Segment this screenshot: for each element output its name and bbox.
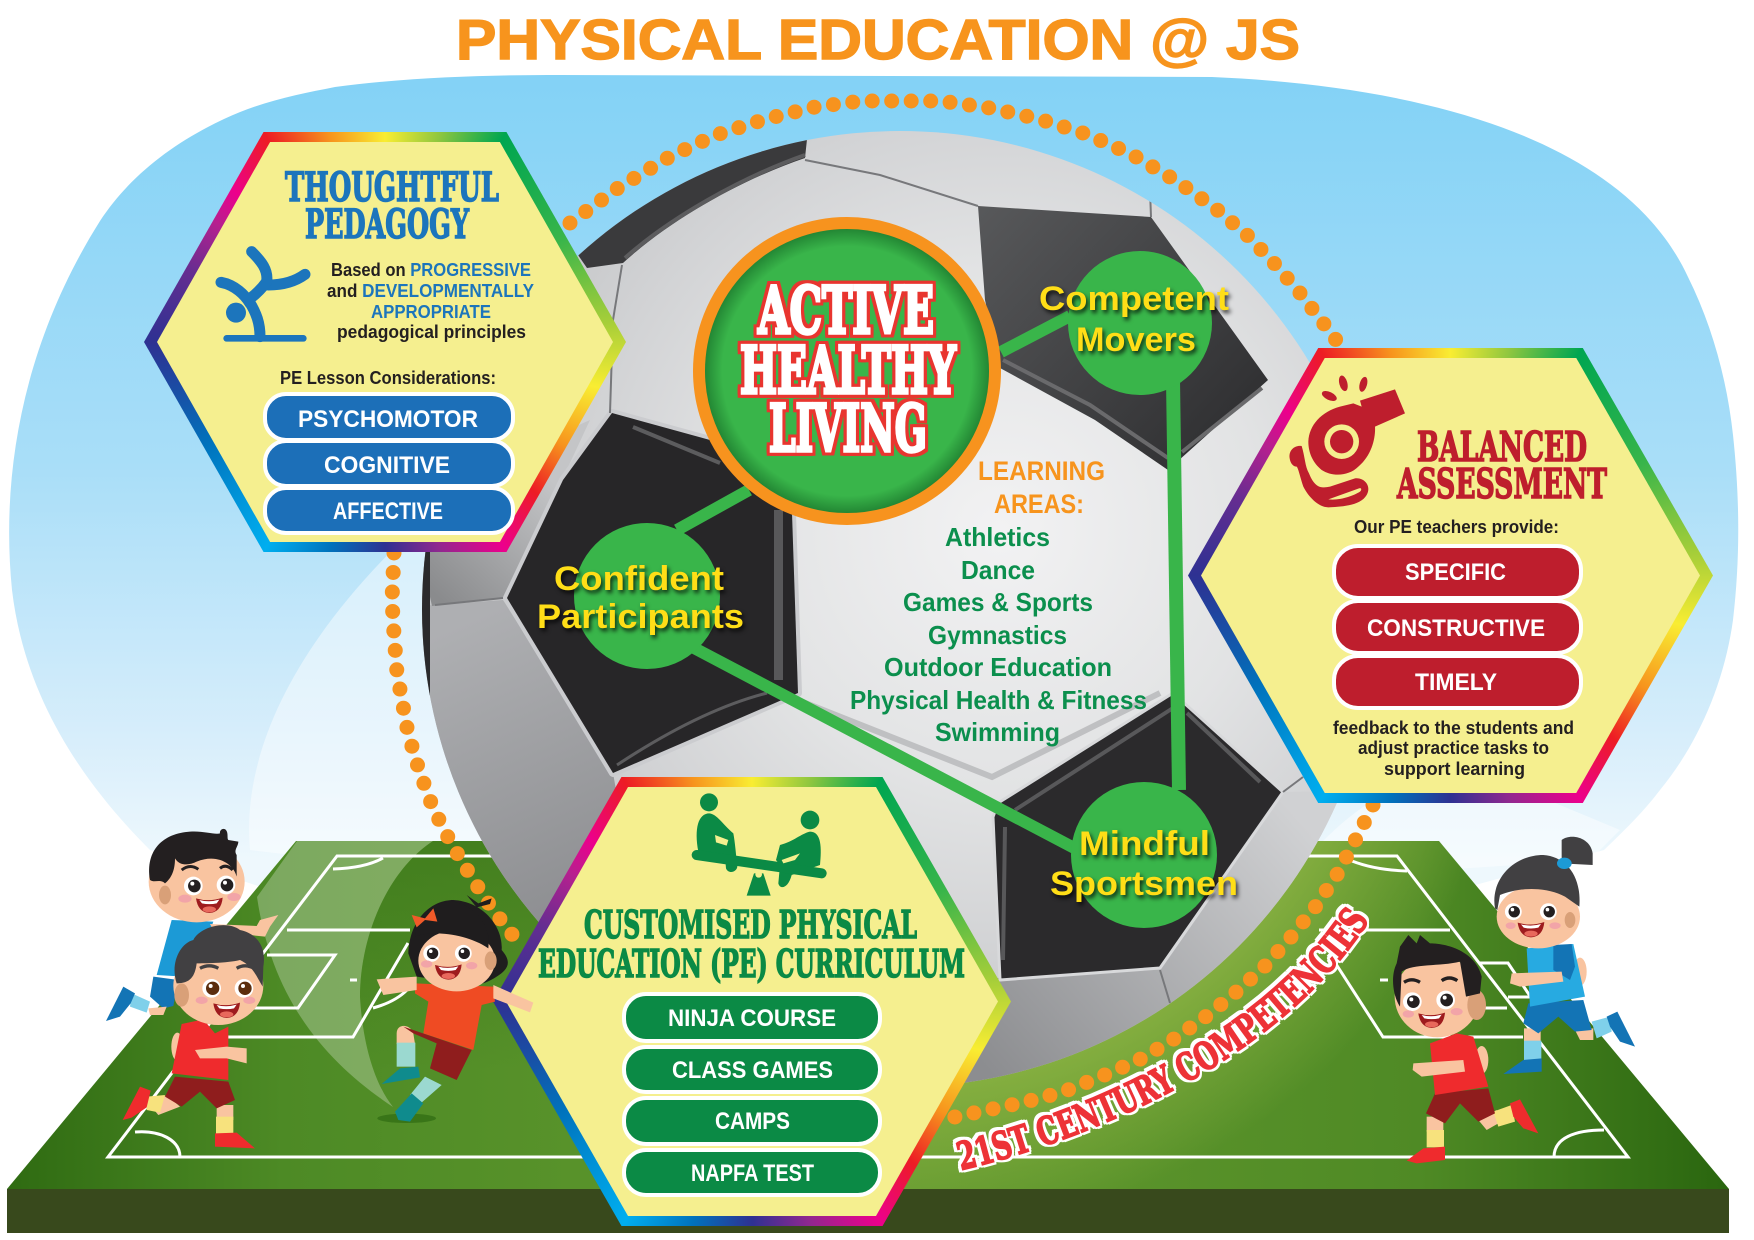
pill: psychomotor: PSYCHOMOTOR <box>298 406 478 433</box>
panel: thoughtful pedagogy <box>144 132 626 552</box>
center circle: active healthy living: HEALTHY <box>740 333 956 409</box>
text: pedagogical principles: Based on PROGRESSIVE <box>331 260 531 280</box>
heading: thoughtful pedagogy <box>284 170 499 240</box>
football <box>418 130 1400 1100</box>
field markings <box>108 856 1628 1157</box>
pill: constructive: CONSTRUCTIVE <box>1367 615 1545 642</box>
pill: napfa test <box>624 1150 880 1195</box>
text: lesson considerations: PE Lesson Considerations: <box>280 368 496 388</box>
text: feedback <box>1333 718 1574 779</box>
pill: specific <box>1334 546 1581 598</box>
ball patch: top right <box>978 206 1268 470</box>
text: pedagogical principles: and DEVELOPMENTALLY <box>327 281 534 301</box>
pill: cognitive: COGNITIVE <box>324 452 450 479</box>
field side face <box>7 1189 1729 1233</box>
node: confident participants: Confident <box>554 560 724 598</box>
heading: customised curriculum <box>538 902 965 986</box>
curved label: 21st century competencies: 21ST CENTURY COMPETENCIES <box>952 904 1370 1173</box>
node: mindful sportsmen <box>1050 782 1238 928</box>
text: feedback: adjust practice tasks to <box>1358 738 1549 758</box>
text: pedagogical principles <box>327 260 534 342</box>
kid: boy in red <box>123 925 264 1148</box>
pill: ninja course <box>624 994 880 1041</box>
heading: thoughtful pedagogy: PEDAGOGY <box>305 201 469 248</box>
learning areas list: Outdoor Education <box>884 652 1112 682</box>
kid: girl in blue <box>1494 837 1635 1074</box>
heading: balanced assessment: BALANCED <box>1417 423 1587 471</box>
sky background <box>9 75 1738 900</box>
kids left: drawn at 3x zoom scale <box>106 829 533 1148</box>
icon: gymnast <box>221 252 305 338</box>
text: pedagogical principles: APPROPRIATE <box>371 302 491 322</box>
kid: girl in orange <box>377 895 533 1123</box>
pill: timely: TIMELY <box>1415 669 1497 696</box>
ball patch: top left <box>578 130 808 268</box>
node: competent movers: Movers <box>1076 321 1196 359</box>
heading: balanced assessment: ASSESSMENT <box>1396 460 1607 508</box>
node: mindful sportsmen: Sportsmen <box>1050 865 1238 903</box>
heading: thoughtful pedagogy: THOUGHTFUL <box>285 164 499 211</box>
icon: seesaw <box>697 793 822 896</box>
ball seams <box>798 693 1160 777</box>
title: PHYSICAL EDUCATION @ JS <box>456 8 1300 72</box>
pill: cognitive <box>265 441 513 486</box>
text: teachers provide: Our PE teachers provide: <box>1354 517 1559 537</box>
text: feedback: feedback to the students and <box>1333 718 1574 738</box>
kids right: drawn at 3x zoom scale <box>1393 837 1635 1163</box>
learning areas list: Dance <box>961 555 1035 585</box>
node: confident participants <box>537 523 744 669</box>
heading: balanced assessment <box>1396 430 1608 500</box>
green connector lines <box>677 316 1179 850</box>
pill: camps <box>624 1098 880 1144</box>
center circle: active healthy living: ACTIVE <box>757 273 934 349</box>
ball patch: left <box>507 413 798 773</box>
panel: customised curriculum <box>493 777 1011 1226</box>
learning areas list: AREAS: <box>994 489 1084 519</box>
pill: timely <box>1334 656 1581 708</box>
learning areas list: Athletics <box>945 522 1050 552</box>
pill: affective <box>265 488 513 533</box>
kid: boy in blue <box>106 829 278 1021</box>
text: feedback: support learning <box>1384 759 1525 779</box>
learning areas list: Physical Health & Fitness <box>850 685 1147 715</box>
light beam in the sky <box>249 480 1620 880</box>
node: competent movers: Competent <box>1039 280 1229 318</box>
pill: class games <box>624 1047 880 1092</box>
learning areas list: Gymnastics <box>928 620 1067 650</box>
orange dotted competency arc <box>392 101 1373 1118</box>
learning areas list: LEARNING <box>978 456 1105 486</box>
icon: whistle <box>1289 375 1405 507</box>
ball panel: bottom gray <box>964 803 1337 1083</box>
ball rim: left dark edge <box>422 552 430 696</box>
pill: constructive <box>1334 601 1581 653</box>
panel: balanced assessment <box>1188 348 1713 803</box>
football field <box>7 841 1729 1233</box>
ball panel: upper left gray <box>420 420 590 606</box>
ball panel: lower left gray <box>422 600 616 922</box>
center circle: active healthy living <box>699 223 995 519</box>
pill: class games: CLASS GAMES <box>672 1057 833 1084</box>
pill: psychomotor <box>265 394 513 440</box>
kid: boy in red <box>1393 935 1538 1163</box>
node: confident participants: Participants <box>537 598 744 636</box>
grass surface <box>7 841 1729 1189</box>
pill: camps: CAMPS <box>715 1108 790 1135</box>
center circle: active healthy living: LIVING <box>769 391 927 467</box>
pill: affective: AFFECTIVE <box>333 498 443 525</box>
pill: specific: SPECIFIC <box>1405 559 1506 586</box>
learning areas list <box>850 456 1147 747</box>
text: pedagogical principles: pedagogical principles <box>337 322 526 342</box>
node: mindful sportsmen: Mindful <box>1079 825 1210 863</box>
ball patch: bottom right <box>993 693 1283 980</box>
learning areas list: Games & Sports <box>903 587 1093 617</box>
pill: ninja course: NINJA COURSE <box>668 1005 836 1032</box>
pill: napfa test: NAPFA TEST <box>691 1160 814 1187</box>
learning areas list: Swimming <box>935 717 1060 747</box>
node: competent movers <box>1039 251 1229 395</box>
